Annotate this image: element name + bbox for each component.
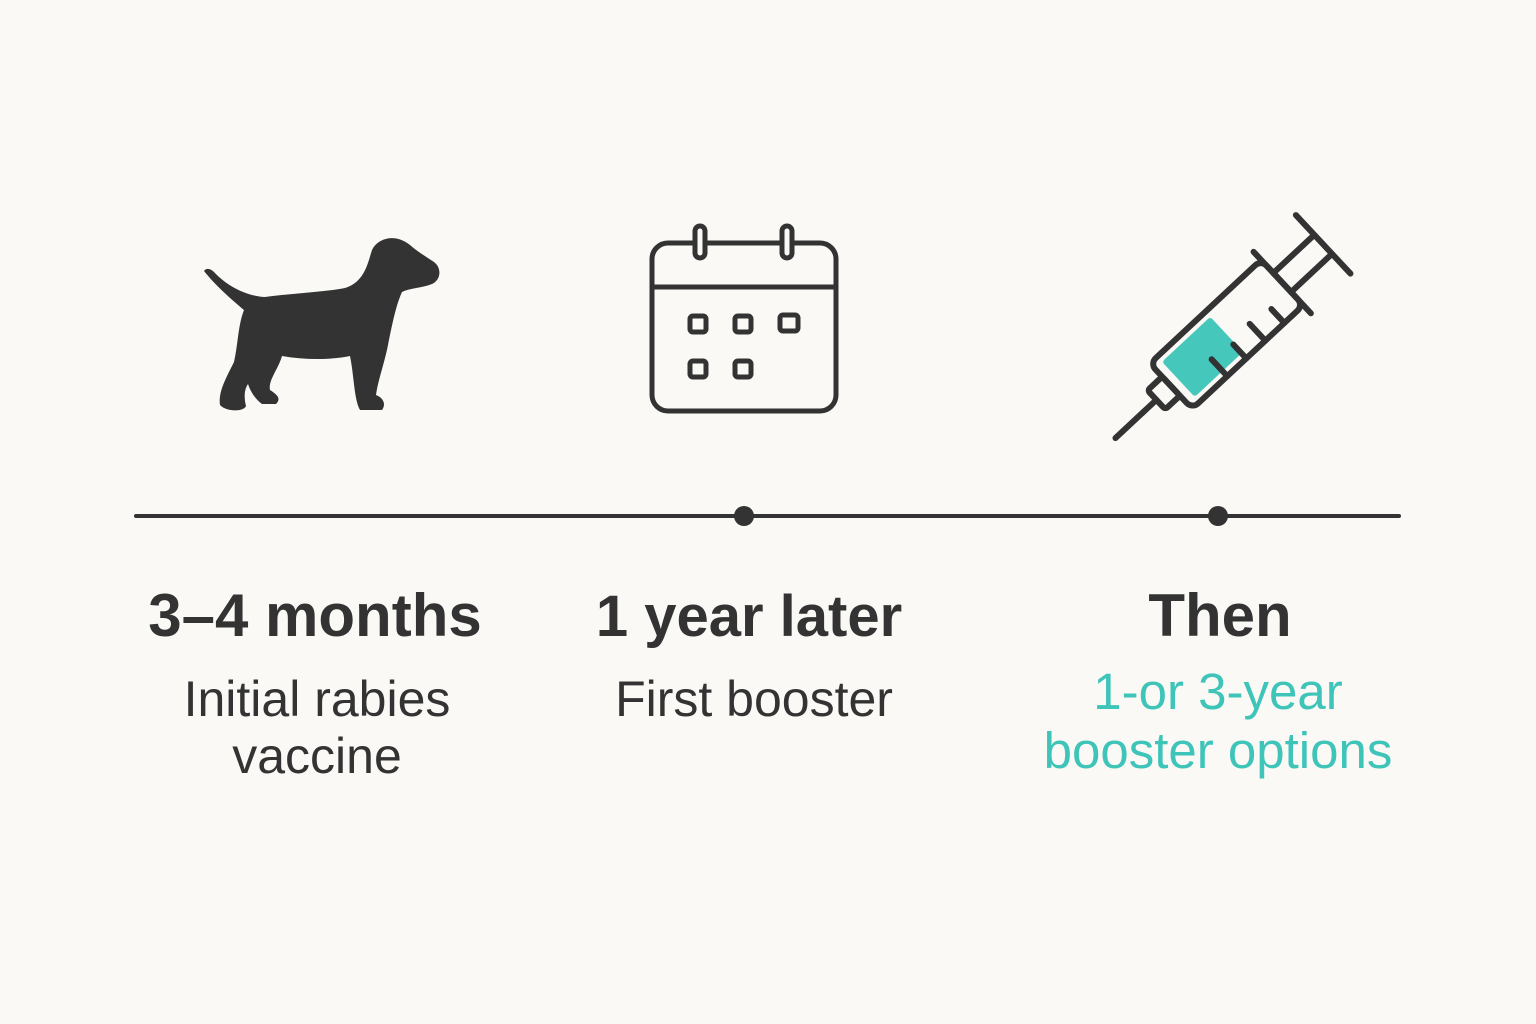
step 3 text: 1-or 3-year [1093, 663, 1343, 720]
icon: dog [204, 238, 439, 410]
step 1 text: Initial rabies [184, 671, 450, 727]
icon: syringe [1087, 214, 1352, 469]
step 2 text: First booster [615, 671, 893, 727]
step 1 text: vaccine [232, 728, 402, 784]
step 1 text [148, 582, 482, 784]
icon: calendar [652, 226, 836, 411]
step 3 text [1044, 582, 1392, 779]
step 2 text: 1 year later [596, 584, 902, 649]
timeline [136, 506, 1399, 526]
step 3 text: booster options [1044, 722, 1392, 779]
step 2 text [596, 584, 902, 727]
step 3 text: Then [1148, 582, 1292, 649]
step 1 text: 3–4 months [148, 582, 482, 649]
